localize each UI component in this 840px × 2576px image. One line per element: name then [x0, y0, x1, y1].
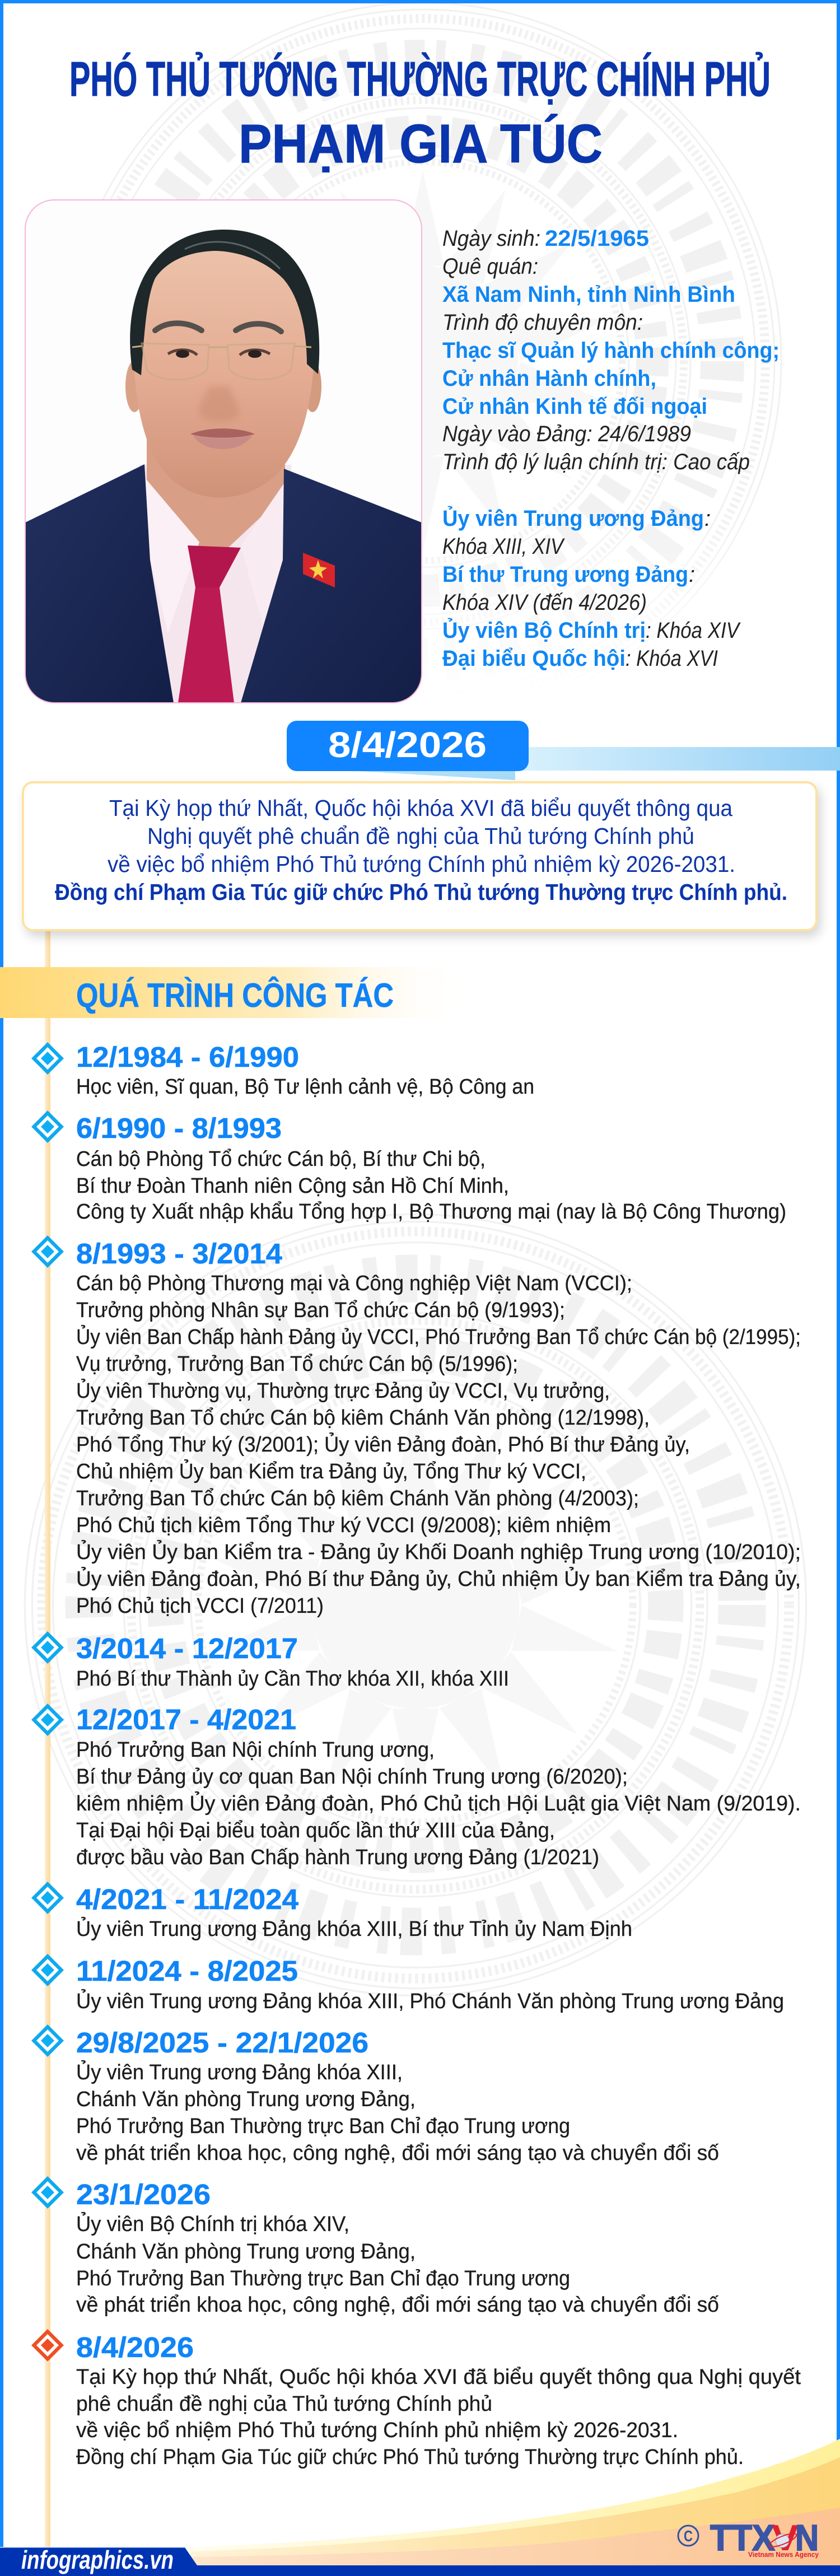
career item 8: về phát triển khoa học, công nghệ, đổi mới sáng tạo và chuyển đổi số [76, 2141, 719, 2165]
career item 3: Cán bộ Phòng Thương mại và Công nghiệp Việt Nam (VCCI); [76, 1272, 632, 1295]
announcement panel: về việc bổ nhiệm Phó Thủ tướng Chính phủ nhiệm kỳ 2026-2031. [108, 851, 735, 877]
career item 5 [31, 1704, 801, 1869]
career item 5: Bí thư Đảng ủy cơ quan Ban Nội chính Trung ương (6/2020); [76, 1765, 628, 1789]
ribbon behind date [287, 747, 840, 780]
personal information: Khóa XIV (đến 4/2026) [442, 590, 647, 615]
personal information: Cử nhân Hành chính, [442, 366, 656, 391]
career item 10: 8/4/2026 [76, 2331, 194, 2363]
career item 5: 12/2017 - 4/2021 [76, 1704, 296, 1735]
career item 3: Chủ nhiệm Ủy ban Kiểm tra Đảng ủy, Tổng Thư ký VCCI, [76, 1459, 586, 1483]
career item 6 [31, 1882, 632, 1941]
career item 3 [31, 1235, 801, 1618]
title [69, 52, 771, 174]
section heading: QUÁ TRÌNH CÔNG TÁC [76, 977, 394, 1014]
career item 3: Trưởng phòng Nhân sự Ban Tổ chức Cán bộ (9/1993); [76, 1299, 565, 1322]
career item 10: về việc bổ nhiệm Phó Thủ tướng Chính phủ nhiệm kỳ 2026-2031. [76, 2419, 678, 2442]
career item 5: được bầu vào Ban Chấp hành Trung ương Đảng (1/2021) [76, 1846, 599, 1869]
personal information: : Khóa XIV [646, 618, 741, 643]
career item 2: Công ty Xuất nhập khẩu Tổng hợp I, Bộ Thương mại (nay là Bộ Công Thương) [76, 1200, 786, 1224]
personal information: : [689, 562, 695, 587]
career item 9: Phó Trưởng Ban Thường trực Ban Chỉ đạo Trung ương [76, 2267, 570, 2290]
date badge [287, 721, 529, 771]
background: bronze drum top [102, 3, 782, 588]
personal information: : Khóa XVI [626, 646, 718, 671]
career item 8: Phó Trưởng Ban Thường trực Ban Chỉ đạo Trung ương [76, 2115, 570, 2138]
career item 9 [31, 2176, 719, 2317]
career item 10 [31, 2329, 801, 2469]
career item 3: Ủy viên Ủy ban Kiểm tra - Đảng ủy Khối Doanh nghiệp Trung ương (10/2010); [76, 1539, 801, 1564]
career item 1: Học viên, Sĩ quan, Bộ Tư lệnh cảnh vệ, Bộ Công an [76, 1075, 534, 1099]
career item 5: Tại Đại hội Đại biểu toàn quốc lần thứ XIII của Đảng, [76, 1819, 555, 1842]
career item 2: 6/1990 - 8/1993 [76, 1112, 282, 1144]
career item 6: 4/2021 - 11/2024 [76, 1883, 299, 1915]
career item 3: Ủy viên Đảng đoàn, Phó Bí thư Đảng ủy, Chủ nhiệm Ủy ban Kiểm tra Đảng ủy, [76, 1566, 801, 1591]
personal information [442, 226, 780, 671]
career item 4: Phó Bí thư Thành ủy Cần Thơ khóa XII, khóa XIII [76, 1667, 509, 1691]
personal information: Khóa XIII, XIV [442, 534, 565, 559]
personal information: Thạc sĩ Quản lý hành chính công; [442, 338, 780, 363]
career item 3: Ủy viên Ban Chấp hành Đảng ủy VCCI, Phó Trưởng Ban Tổ chức Cán bộ (2/1995); [76, 1324, 801, 1349]
personal information: Trình độ chuyên môn: [442, 310, 643, 335]
career item 4: 3/2014 - 12/2017 [76, 1632, 298, 1664]
career item 2 [31, 1110, 786, 1224]
career item 10: Tại Kỳ họp thứ Nhất, Quốc hội khóa XVI đã biểu quyết thông qua Nghị quyết [76, 2365, 801, 2389]
personal information: : [704, 506, 711, 531]
timeline spine [45, 930, 50, 2547]
footer swoosh [185, 2439, 840, 2568]
career item 3: Ủy viên Thường vụ, Thường trực Đảng ủy VCCI, Vụ trưởng, [76, 1378, 610, 1403]
career item 3: Phó Chủ tịch VCCI (7/2011) [76, 1594, 324, 1618]
career item 2: Cán bộ Phòng Tổ chức Cán bộ, Bí thư Chi bộ, [76, 1147, 486, 1171]
website label: infographics.vn [21, 2545, 174, 2574]
background: bronze drum bottom [25, 1214, 806, 1996]
personal information: 22/5/1965 [545, 226, 649, 251]
career item 5: Phó Trưởng Ban Nội chính Trung ương, [76, 1738, 435, 1762]
footer bar [0, 2547, 840, 2576]
personal information: Đại biểu Quốc hội [442, 646, 626, 671]
personal information: Cử nhân Kinh tế đối ngoại [442, 394, 707, 419]
personal information: Ngày vào Đảng: 24/6/1989 [442, 422, 691, 446]
logo: TTXVN: Vietnam News Agency [748, 2550, 819, 2559]
announcement panel [23, 782, 816, 930]
announcement panel: Nghị quyết phê chuẩn đề nghị của Thủ tướng Chính phủ [147, 823, 694, 849]
date badge: 8/4/2026 [328, 725, 487, 765]
career item 10: phê chuẩn đề nghị của Thủ tướng Chính phủ [76, 2392, 492, 2416]
career item 7 [31, 1954, 784, 2013]
career item 3: Phó Chủ tịch kiêm Tổng Thư ký VCCI (9/2008); kiêm nhiệm [76, 1514, 611, 1537]
announcement panel: Tại Kỳ họp thứ Nhất, Quốc hội khóa XVI đã biểu quyết thông qua [109, 795, 732, 821]
career item 8: Ủy viên Trung ương Đảng khóa XIII, [76, 2060, 403, 2084]
career item 1 [31, 1041, 534, 1099]
personal information: Trình độ lý luận chính trị: Cao cấp [442, 450, 750, 474]
personal information: Bí thư Trung ương Đảng [442, 562, 688, 587]
career item 9: Ủy viên Bộ Chính trị khóa XIV, [76, 2211, 349, 2236]
career item 5: kiêm nhiệm Ủy viên Đảng đoàn, Phó Chủ tịch Hội Luật gia Việt Nam (9/2019). [76, 1791, 801, 1816]
career item 8 [31, 2024, 719, 2165]
personal information: Ủy viên Bộ Chính trị [442, 617, 646, 643]
career item 4 [31, 1631, 509, 1691]
career item 3: Phó Tổng Thư ký (3/2001); Ủy viên Đảng đoàn, Phó Bí thư Đảng ủy, [76, 1432, 690, 1457]
personal information: Ủy viên Trung ương Đảng [442, 505, 704, 531]
career item 7: Ủy viên Trung ương Đảng khóa XIII, Phó Chánh Văn phòng Trung ương Đảng [76, 1989, 784, 2013]
personal information: Quê quán: [442, 254, 538, 279]
logo: TTXVN: C [684, 2527, 693, 2545]
logo: TTXVN: TTX [710, 2517, 775, 2558]
personal information: Ngày sinh: [442, 226, 540, 251]
career item 9: về phát triển khoa học, công nghệ, đổi mới sáng tạo và chuyển đổi số [76, 2293, 719, 2317]
career item 7: 11/2024 - 8/2025 [76, 1955, 298, 1987]
career item 3: Vụ trưởng, Trưởng Ban Tổ chức Cán bộ (5/1996); [76, 1352, 518, 1376]
logo: TTXVN: N [795, 2517, 819, 2558]
career item 10: Đồng chí Phạm Gia Túc giữ chức Phó Thủ tướng Thường trực Chính phủ. [76, 2446, 744, 2469]
career item 6: Ủy viên Trung ương Đảng khóa XIII, Bí thư Tỉnh ủy Nam Định [76, 1916, 632, 1941]
career item 8: Chánh Văn phòng Trung ương Đảng, [76, 2088, 416, 2111]
career item 3: 8/1993 - 3/2014 [76, 1238, 283, 1270]
personal information: Xã Nam Ninh, tỉnh Ninh Bình [442, 282, 735, 307]
career item 9: 23/1/2026 [76, 2178, 211, 2210]
career item 3: Trưởng Ban Tổ chức Cán bộ kiêm Chánh Văn phòng (12/1998), [76, 1406, 650, 1430]
section heading [0, 967, 470, 1018]
career item 8: 29/8/2025 - 22/1/2026 [76, 2027, 368, 2059]
career item 1: 12/1984 - 6/1990 [76, 1041, 299, 1073]
career item 3: Trưởng Ban Tổ chức Cán bộ kiêm Chánh Văn phòng (4/2003); [76, 1487, 639, 1510]
logo: TTXVN: V [772, 2517, 799, 2558]
title: PHẠM GIA TÚC [239, 113, 603, 174]
career item 2: Bí thư Đoàn Thanh niên Cộng sản Hồ Chí Minh, [76, 1174, 509, 1198]
portrait [25, 200, 422, 703]
career item 9: Chánh Văn phòng Trung ương Đảng, [76, 2240, 416, 2264]
logo: TTXVN [678, 2517, 819, 2559]
